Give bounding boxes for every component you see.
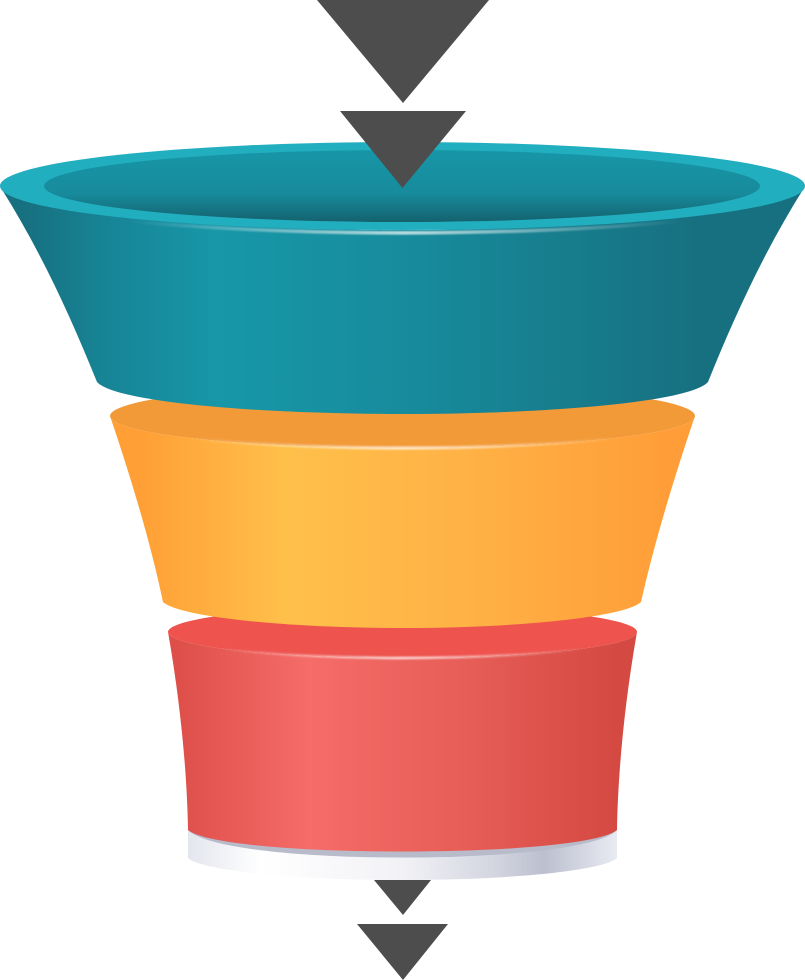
arrow: second into funnel: [340, 111, 466, 188]
tier: red: [168, 606, 637, 852]
arrow: top large: [317, 0, 489, 103]
teal inner opening: [44, 150, 760, 222]
tier: teal: [0, 142, 805, 414]
base plate: [188, 830, 617, 880]
tier: orange: [110, 384, 695, 628]
arrow: bottom: [357, 924, 448, 980]
arrow: lower small: [374, 880, 431, 915]
teal rim: [0, 142, 805, 230]
